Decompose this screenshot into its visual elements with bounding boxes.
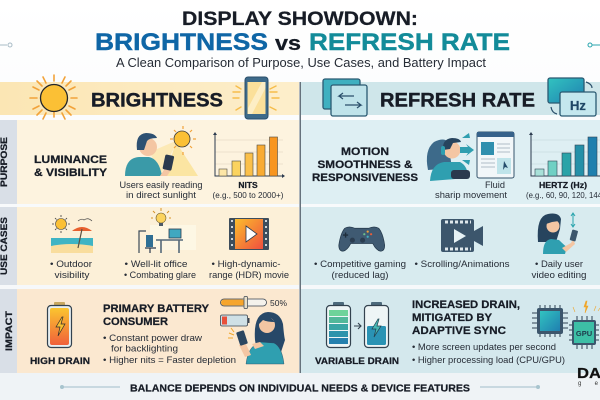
impact: increased drain text: INCREASED DRAIN, — [412, 299, 520, 311]
impact: primary battery consumer text — [103, 303, 236, 366]
icon: browser window — [477, 132, 514, 178]
caption: fluid movement: sharip movement — [435, 190, 507, 200]
text: motion heading: SMOOTHNESS & — [318, 159, 413, 171]
logo: DA — [577, 365, 600, 382]
decorative circuit nodes — [0, 43, 12, 47]
caption: fluid movement: Fluid — [485, 180, 505, 190]
icon: battery with bolt — [48, 302, 72, 348]
use case: gaming: • Competitive gaming — [314, 259, 406, 270]
text: luminance heading: & VISIBILITY — [34, 167, 108, 179]
icon: sun — [30, 75, 77, 119]
use case: hdr movie — [209, 218, 289, 281]
use case: outdoor visibility: visibility — [54, 270, 90, 281]
text: motion heading — [312, 146, 418, 184]
row label: impact — [0, 289, 17, 373]
panel: brightness header — [0, 75, 299, 119]
title: DISPLAY SHOWDOWN: — [182, 8, 418, 30]
caption: fluid movement — [435, 180, 507, 200]
use case: daily user: • Daily user — [535, 259, 583, 270]
use case: scrolling: • Scrolling/Animations — [414, 259, 510, 270]
bar chart: nits — [212, 132, 285, 200]
logo: g e — [578, 381, 599, 387]
caption: users reading — [120, 180, 202, 200]
caption: users reading: in direct sunlight — [126, 190, 196, 200]
row label: use cases — [0, 207, 17, 285]
impact: primary battery consumer text: • Constant power draw — [103, 333, 202, 344]
use case: hdr movie: • High-dynamic- — [212, 259, 280, 270]
icon: phone — [233, 77, 279, 119]
caption: users reading: Users easily reading — [120, 180, 202, 190]
arrow — [354, 323, 361, 329]
use case: daily user: video editing — [532, 270, 586, 281]
icon: woman pointing at phone — [228, 312, 285, 364]
icon: full battery — [326, 302, 350, 348]
use case: scrolling — [414, 219, 510, 270]
use case: gaming — [314, 227, 406, 281]
use case: daily user — [532, 213, 586, 281]
text: luminance heading — [34, 154, 108, 179]
icon: brightness slider: 50% — [270, 298, 287, 308]
icon: woman with phone — [538, 213, 578, 254]
use case: outdoor visibility — [50, 215, 93, 281]
title: BRIGHTNESS — [95, 29, 268, 56]
impact: increased drain text — [412, 299, 565, 366]
icon: video camera — [441, 219, 483, 252]
impact: increased drain text: ADAPTIVE SYNC — [412, 325, 506, 337]
bar chart: nits: (e.g., 500 to 2000+) — [212, 190, 284, 200]
impact: increased drain text: • Higher processing load (CPU/GPU) — [412, 355, 565, 366]
icon: low battery — [220, 315, 250, 326]
impact: variable drain batteries: VARIABLE DRAIN — [315, 356, 399, 367]
impact: primary battery consumer text: PRIMARY BATTERY — [103, 303, 210, 315]
impact: increased drain text: • More screen updates per second — [412, 342, 556, 353]
bar chart: nits: NITS — [238, 180, 258, 190]
icon: cpu chip — [532, 305, 568, 337]
text: motion heading: RESPONSIVENESS — [312, 172, 418, 184]
use case: office: • Combating glare — [124, 270, 196, 281]
text: motion heading: MOTION — [341, 146, 389, 158]
title: A Clean Comparison of Purpose, Use Cases, and Battery Impact — [116, 56, 487, 70]
text: luminance heading: LUMINANCE — [34, 154, 107, 166]
use case: hdr movie: range (HDR) movie — [209, 270, 289, 281]
panel: refresh rate header — [301, 78, 600, 116]
impact: high drain battery — [30, 302, 90, 367]
title: REFRESH RATE — [309, 29, 510, 56]
impact: increased drain text: MITIGATED BY — [412, 312, 493, 324]
panel: row backgrounds — [17, 82, 600, 373]
icon: hz windows: Hz — [570, 98, 586, 113]
panel: refresh rate header: REFRESH RATE — [380, 90, 535, 112]
footer band — [0, 373, 600, 400]
use case: office — [124, 208, 196, 281]
row label: impact: IMPACT — [4, 311, 15, 351]
bar chart: hertz: HERTZ (Hz) — [539, 180, 587, 190]
icon: game controller — [339, 227, 385, 251]
icon: gpu chip — [569, 301, 600, 349]
icon: film — [229, 218, 269, 250]
icon: swap windows — [323, 79, 367, 116]
bar chart: hertz — [526, 132, 600, 200]
impact: primary battery consumer text: CONSUMER — [103, 316, 168, 328]
icon: gpu chip: GPU — [576, 329, 592, 338]
title — [95, 8, 510, 70]
impact: high drain battery: HIGH DRAIN — [30, 356, 90, 367]
panel: brightness header: BRIGHTNESS — [91, 90, 223, 112]
title: vs — [275, 33, 301, 55]
icon: desk and bulb — [139, 208, 196, 253]
impact: variable drain batteries — [315, 302, 399, 367]
icon: hz windows — [548, 78, 596, 116]
impact: primary battery consumer text: for backlighting — [111, 344, 178, 354]
use case: office: • Well-lit office — [124, 259, 188, 270]
icon: beach — [51, 215, 93, 253]
use case: gaming: (reduced lag) — [332, 270, 388, 281]
impact: primary battery consumer text: • Higher nits = Faster depletion — [103, 355, 236, 366]
icon: person reading in sunlight — [125, 126, 198, 176]
row label: purpose — [0, 120, 17, 204]
use case: outdoor visibility: • Outdoor — [50, 259, 92, 270]
icon: gamer — [427, 133, 474, 181]
icon: partial battery with bolt — [364, 302, 388, 348]
footer text: BALANCE DEPENDS ON INDIVIDUAL NEEDS & DEVICE FEATURES — [130, 382, 470, 394]
icon: brightness slider — [220, 296, 287, 308]
